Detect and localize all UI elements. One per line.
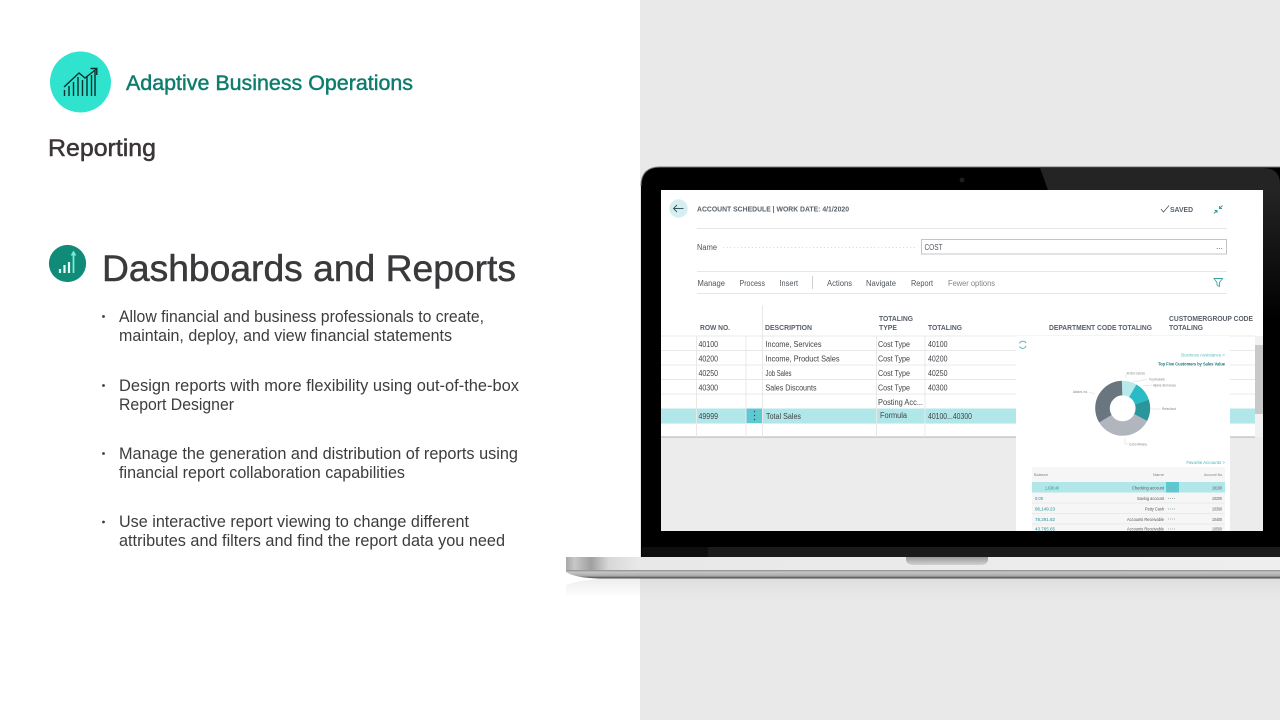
chart heading bbox=[1158, 352, 1225, 368]
table rows: 40250 bbox=[928, 369, 948, 378]
favorite accounts table: 78,291.82 bbox=[1035, 517, 1056, 522]
favorite accounts table: 10500 bbox=[1212, 526, 1222, 532]
table column headers: TYPE bbox=[879, 323, 897, 332]
donut chart: Alpine Ski House bbox=[1153, 384, 1176, 388]
favorite accounts table: Petty Cash bbox=[1145, 506, 1164, 512]
action menu: Process bbox=[740, 279, 765, 288]
table rows: 49999 bbox=[698, 412, 718, 421]
chart heading: Top Five Customers by Sales Value bbox=[1158, 362, 1225, 368]
favorite accounts table: 43,765.65 bbox=[1035, 526, 1056, 532]
favorite accounts table: 1,638.40 bbox=[1045, 486, 1059, 490]
favorite accounts table bbox=[1032, 460, 1225, 532]
bullet 3: Manage the generation and distribution of reports using bbox=[119, 445, 518, 463]
table rows: Posting Acc... bbox=[878, 398, 923, 407]
table rows: Income, Services bbox=[766, 340, 822, 349]
table rows: 40300 bbox=[698, 384, 718, 392]
favorite accounts table: Saving account bbox=[1137, 496, 1165, 501]
donut chart: All Others Customers bbox=[1127, 372, 1145, 376]
favorite accounts table: 10200 bbox=[1212, 496, 1222, 501]
grey empty area below table bbox=[661, 437, 1263, 531]
table rows: 40300 bbox=[928, 384, 948, 392]
bullet 2: Design reports with more flexibility using out-of-the-box bbox=[119, 377, 520, 395]
account schedule table bbox=[661, 305, 1263, 531]
table rows: Cost Type bbox=[878, 354, 910, 364]
bullet 1 bbox=[102, 308, 484, 345]
favorite accounts table: 10100 bbox=[1212, 486, 1222, 490]
table rows: Cost Type bbox=[878, 369, 910, 378]
favorite accounts table: Balance bbox=[1034, 473, 1048, 477]
action menu: Manage bbox=[698, 279, 726, 288]
bullet 1: maintain, deploy, and view financial statements bbox=[119, 327, 452, 345]
bullet 2: Report Designer bbox=[119, 396, 234, 414]
name field: COST bbox=[924, 243, 943, 252]
favorite accounts table: 10400 bbox=[1212, 517, 1222, 522]
laptop reflection bbox=[566, 579, 1280, 603]
action menu bbox=[698, 276, 1222, 289]
chart heading: Business Assistance > bbox=[1181, 352, 1225, 358]
name field bbox=[697, 228, 1227, 294]
heading: Dashboards and Reports: Dashboards and Reports bbox=[102, 247, 516, 289]
table column headers: TOTALING bbox=[879, 314, 913, 323]
favorite accounts table: 0.00 bbox=[1035, 496, 1044, 501]
icon: small bar chart badge bbox=[49, 245, 86, 282]
laptop mockup bbox=[566, 167, 1280, 603]
name field: Name bbox=[697, 243, 718, 252]
bullet 4: Use interactive report viewing to change different bbox=[119, 513, 469, 531]
favorite accounts table: 96,149.23 bbox=[1035, 506, 1056, 512]
app screen bbox=[661, 190, 1263, 532]
table rows: 40100 bbox=[928, 340, 948, 349]
bullet 2 bbox=[102, 377, 520, 414]
action menu: Insert bbox=[780, 279, 799, 288]
table column headers: TOTALING bbox=[1169, 323, 1203, 332]
table column headers: CUSTOMERGROUP CODE bbox=[1169, 314, 1253, 323]
table column headers: DESCRIPTION bbox=[765, 323, 812, 332]
table rows: 40200 bbox=[698, 354, 718, 364]
name field: ... bbox=[1216, 242, 1223, 251]
bullet 1: Allow financial and business professionals to create, bbox=[119, 308, 484, 326]
overlay panel bbox=[1016, 336, 1230, 532]
bullet 3: financial report collaboration capabilities bbox=[119, 464, 405, 482]
icon: growth chart badge bbox=[50, 52, 111, 112]
table rows: Sales Discounts bbox=[766, 384, 816, 392]
app header bar: ACCOUNT SCHEDULE | WORK DATE: 4/1/2020 bbox=[697, 204, 849, 214]
background: grey right panel bbox=[640, 0, 1280, 720]
table rows: Total Sales bbox=[766, 412, 801, 421]
favorite accounts table: Accounts Receivable bbox=[1127, 526, 1164, 532]
table rows bbox=[698, 340, 972, 421]
bullet 3 bbox=[102, 445, 518, 482]
favorite accounts table: Account No. bbox=[1204, 473, 1223, 477]
donut chart: Trey Research bbox=[1149, 378, 1165, 382]
selected row highlight bbox=[661, 408, 1255, 423]
favorite accounts table: Accounts Receivable bbox=[1127, 517, 1164, 522]
table rows: Cost Type bbox=[878, 340, 910, 349]
favorite accounts table: Favorite Accounts > bbox=[1186, 460, 1225, 465]
bullet 4 bbox=[102, 513, 505, 550]
table rows: Formula bbox=[880, 411, 908, 420]
laptop lid bezel bbox=[641, 167, 1280, 557]
table column headers bbox=[700, 314, 1253, 332]
icon: refresh bbox=[1020, 341, 1026, 348]
favorite accounts table: Name bbox=[1153, 473, 1164, 477]
action menu: Actions bbox=[827, 279, 852, 288]
table rows: Cost Type bbox=[878, 384, 910, 392]
table rows: 40200 bbox=[928, 354, 948, 364]
donut chart: Adatum, Inc. bbox=[1073, 390, 1088, 394]
donut chart: Coho Winery bbox=[1129, 442, 1147, 446]
subheading: Reporting: Reporting bbox=[48, 135, 156, 162]
favorite accounts table: Checking account bbox=[1132, 486, 1165, 490]
donut chart: Relecloud bbox=[1162, 407, 1176, 411]
table rows: 40100...40300 bbox=[928, 412, 972, 421]
table column headers: ROW NO. bbox=[700, 323, 730, 332]
action menu: Fewer options bbox=[948, 279, 995, 288]
donut chart bbox=[1073, 372, 1176, 446]
action menu: Report bbox=[911, 279, 934, 288]
bullet 4: attributes and filters and find the report data you need bbox=[119, 532, 505, 550]
app header bar: SAVED bbox=[1170, 205, 1194, 214]
background: white left side bbox=[0, 0, 640, 720]
scrollbar bbox=[1255, 336, 1263, 437]
table rows: Income, Product Sales bbox=[766, 354, 840, 364]
table column headers: TOTALING bbox=[928, 323, 962, 332]
laptop base bbox=[566, 557, 1280, 578]
bullet list bbox=[102, 308, 520, 550]
app header bar bbox=[669, 199, 1222, 218]
action menu: Navigate bbox=[866, 279, 897, 288]
table rows: 40250 bbox=[698, 369, 718, 378]
table column headers: DEPARTMENT CODE TOTALING bbox=[1049, 323, 1152, 332]
table rows: Job Sales bbox=[766, 369, 792, 378]
heading: Adaptive Business Operations: Adaptive Business Operations bbox=[126, 72, 413, 95]
favorite accounts table: 10300 bbox=[1212, 506, 1222, 512]
table rows: 40100 bbox=[698, 340, 718, 349]
